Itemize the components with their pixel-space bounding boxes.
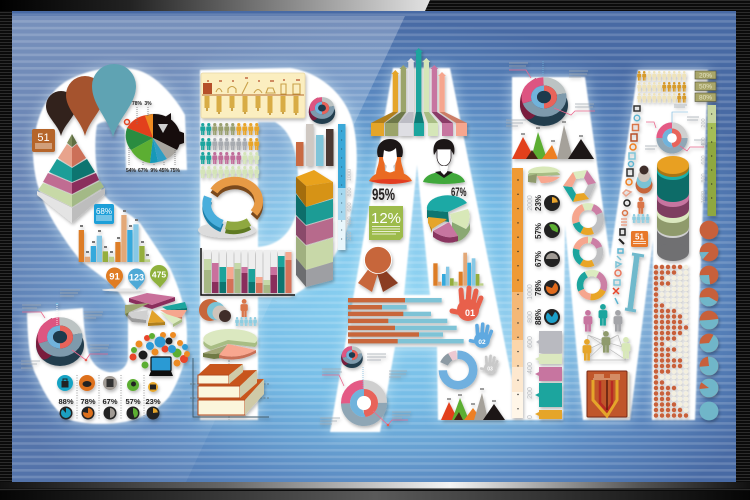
pig percentage labels: [126, 101, 181, 174]
category icons: [57, 375, 158, 392]
orange badge 51: [631, 231, 648, 247]
slanted blue bar: [625, 254, 644, 311]
green thermometer scale: 600: [701, 155, 707, 165]
letter S: [27, 68, 187, 424]
orange badge 51: 51: [635, 232, 644, 242]
person with people row M: [632, 197, 649, 223]
percent buttons: 80%: [699, 94, 712, 102]
blue thermometer scale: 600: [347, 202, 353, 212]
rotated percent black pies: 67%: [534, 251, 543, 267]
blue thermometer scale: 200: [347, 231, 353, 241]
people rows P: [200, 123, 259, 178]
seven perspective arrows: [371, 48, 467, 136]
white letters glow: [27, 68, 708, 432]
dot matrix: [656, 267, 692, 416]
piggy bank pie chart: [124, 101, 184, 174]
four vertical bars: [296, 124, 334, 166]
small percent pies: [60, 406, 160, 420]
location pins: 91 123 475: 475: [152, 270, 166, 280]
stat: 67%: 67%: [451, 185, 467, 199]
green thermometer scale: 200: [701, 118, 707, 128]
mountains chart M: [512, 122, 594, 159]
pig percentage labels: 78%: [132, 101, 143, 107]
red book cover: [587, 371, 630, 417]
orange thermometer scale: [512, 168, 534, 419]
pig percentage labels: 3%: [144, 101, 152, 107]
rotated percent black pies: 88%: [534, 309, 543, 325]
blue thermometer scale: 800: [347, 187, 353, 197]
layered pyramid: [37, 134, 105, 223]
stacked 3D cubes: [296, 170, 333, 287]
pale pie M: [528, 166, 560, 183]
octagon ring 2: [576, 206, 600, 232]
orange thermometer scale: 0: [527, 415, 534, 419]
percent labels: 67%: [102, 397, 118, 406]
icon cloud and laptop: [130, 332, 190, 376]
ribbon tags: [535, 331, 562, 419]
pig percentage labels: 45%: [159, 168, 170, 174]
hand 01: 01: [465, 308, 475, 318]
people network: [583, 304, 630, 361]
horizontal stacked bars: [348, 298, 464, 343]
hand 01: [452, 288, 481, 320]
percent labels: 23%: [145, 397, 161, 406]
infographic content: [21, 48, 718, 426]
orange thermometer scale: 400: [527, 362, 534, 374]
concentric stack: [636, 166, 652, 194]
rotated percent black pies: [534, 195, 560, 325]
orange thermometer scale: 2000: [527, 195, 534, 211]
pig percentage labels: 54%: [126, 168, 137, 174]
hand 02: 02: [478, 339, 486, 346]
stack of books with axes: [190, 358, 270, 420]
map pins: three large teardrops: [46, 64, 136, 137]
green thermometer scale: 400: [701, 137, 707, 147]
octagon ring 4: [580, 273, 604, 297]
laptop: [149, 357, 173, 376]
book middle: [198, 370, 257, 398]
exploded pie chart: [125, 293, 187, 327]
rotated percent black pies: 78%: [534, 280, 543, 296]
small 3D donut A: [341, 346, 363, 368]
3D donut chart S with callouts: [21, 290, 109, 368]
icon row with small pies S: [57, 375, 161, 420]
orange thermometer scale: 800: [527, 311, 534, 323]
pale 3D pie P: [203, 329, 257, 360]
rotated percent black pies: 57%: [534, 223, 543, 239]
location pins: 91 123 475: 91: [109, 272, 120, 282]
3D donut small P: [309, 98, 335, 124]
rotated percent black pies: 23%: [534, 195, 543, 211]
diagonal icon column: [613, 106, 640, 304]
percent buttons: 50%: [699, 84, 712, 90]
blue thermometer scale: [338, 124, 353, 250]
layered cylinder: [657, 156, 689, 261]
book bottom: [198, 379, 264, 415]
pig percentage labels: 67%: [138, 168, 149, 174]
octagon ring 3: [576, 240, 600, 264]
stacked bar chart P: [201, 248, 295, 295]
orange thermometer scale: 1000: [527, 284, 534, 300]
hand 03: [481, 356, 497, 374]
yellow panel with icons and bars: [201, 73, 305, 118]
overlapping circles: [199, 299, 231, 322]
3D segmented ring: [198, 181, 259, 238]
orange thermometer scale: 200: [527, 387, 534, 399]
location pins: 91 123 475: [102, 265, 168, 292]
location pins: 91 123 475: 123: [129, 272, 144, 282]
blue ring chart: [443, 355, 473, 385]
man avatar: [423, 139, 465, 184]
pig percentage labels: 75%: [170, 168, 181, 174]
hexagon ring: [563, 170, 596, 202]
badge: 51: 51: [37, 132, 50, 144]
orange thermometer scale: 600: [527, 336, 534, 348]
bar chart: S upper: [79, 211, 150, 262]
3D donut M top with callouts: [506, 61, 595, 126]
progress pies column: [700, 221, 718, 420]
green 12% box: [369, 206, 403, 240]
badge: 68%: [94, 204, 114, 224]
woman avatar: [369, 139, 412, 184]
stat: 95%: 95%: [372, 185, 395, 204]
white SPAM letterforms: [27, 68, 708, 432]
hand 02: [470, 324, 491, 348]
blue thermometer scale: 1000: [347, 169, 353, 181]
letter P: [200, 68, 357, 420]
book top: [198, 364, 243, 384]
percent labels: [58, 397, 161, 406]
green thermometer scale: 800: [701, 173, 707, 183]
bar chart: A: [433, 253, 483, 286]
blue thermometer scale: 400: [347, 216, 353, 226]
people rows M: [637, 71, 686, 103]
letter A: [330, 68, 520, 432]
percent labels: 57%: [125, 397, 141, 406]
flat donut chart A with callouts: [320, 354, 411, 426]
percent buttons: 20%: [699, 72, 712, 79]
green thermometer scale: 1000: [701, 191, 707, 203]
green thermometer scale: [701, 105, 716, 216]
award ribbon: [358, 246, 398, 292]
pig percentage labels: 9%: [150, 168, 158, 174]
mountains chart A: [441, 389, 505, 420]
3D pie A: [427, 195, 470, 243]
percent labels: 88%: [58, 397, 74, 406]
badge: 51: [32, 129, 55, 152]
letter M: [512, 70, 708, 420]
person with small people row: [235, 299, 257, 326]
badge: 68%: 68%: [96, 207, 112, 216]
percent labels: 78%: [80, 397, 96, 406]
green 12% box: 12%: [371, 210, 401, 227]
percent buttons: [695, 71, 716, 102]
hand 03: 03: [487, 366, 493, 372]
small flat donut M: [645, 105, 707, 151]
